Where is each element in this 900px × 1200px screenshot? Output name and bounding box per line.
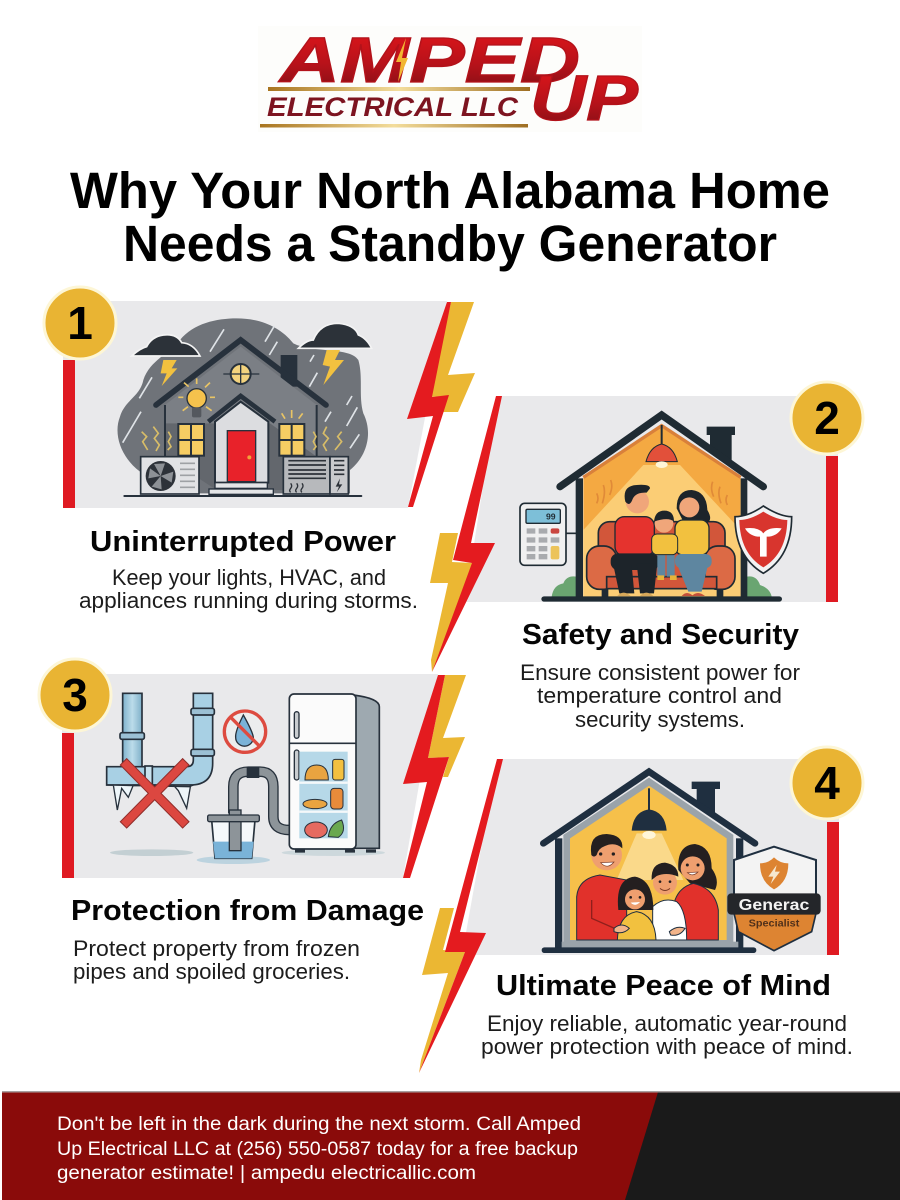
body 2 line 2: temperature control and <box>537 683 782 708</box>
light cone <box>583 465 741 597</box>
badge 1 <box>44 287 116 359</box>
wall left <box>555 838 562 948</box>
lightning right <box>323 350 344 385</box>
panel 2 background <box>465 396 838 602</box>
footer top edge <box>2 1091 900 1092</box>
title line 2: Needs a Standby Generator <box>123 215 777 272</box>
footer line 3: generator estimate! | ampedu electricallic.com <box>57 1163 476 1184</box>
logo word ELECTRICAL LLC: ELECTRICAL LLC <box>267 92 519 122</box>
round window <box>223 364 259 384</box>
logo word AMPED: AMPED <box>277 24 580 96</box>
text block 1 <box>79 526 418 613</box>
floor <box>542 942 756 953</box>
wall right <box>736 838 743 948</box>
left cloud <box>132 335 200 356</box>
porch gable <box>208 396 275 422</box>
badge 2: 2 <box>814 392 840 444</box>
logo <box>258 24 642 134</box>
panel 3 bolt yellow <box>428 675 466 777</box>
roof <box>560 415 763 487</box>
red door <box>227 431 256 482</box>
badge 4: 4 <box>814 757 840 809</box>
body 4 line 2: power protection with peace of mind. <box>481 1034 853 1059</box>
panel 2 bolt yellow <box>430 533 473 672</box>
wall left <box>576 478 583 598</box>
panel 3 background <box>62 674 438 878</box>
house interior <box>567 782 730 943</box>
fridge <box>289 694 379 853</box>
panel 1 red bar <box>63 360 75 508</box>
wall lines <box>165 405 317 457</box>
rain <box>123 326 359 448</box>
badge 3: 3 <box>62 669 88 721</box>
heading 1: Uninterrupted Power <box>90 526 396 558</box>
panel 4 bolt red <box>419 759 503 1073</box>
body 2 line 3: security systems. <box>575 707 745 732</box>
porch <box>215 402 268 483</box>
panel 1 bolt red <box>407 302 451 507</box>
right cloud <box>298 323 372 348</box>
logo gold rule top <box>268 87 530 91</box>
Generac specialist badge <box>727 847 821 951</box>
heading 4: Ultimate Peace of Mind <box>496 970 831 1002</box>
panel 3 bolt red <box>403 675 449 878</box>
father <box>577 834 627 940</box>
mother <box>675 844 718 940</box>
air conditioner <box>141 457 199 494</box>
pendant lamp <box>632 788 667 839</box>
house wall lower shade <box>165 423 317 490</box>
body 1 line 1: Keep your lights, HVAC, and <box>112 565 386 590</box>
wall right <box>741 478 747 598</box>
logo background <box>258 26 642 132</box>
badge 3 <box>39 659 111 731</box>
panel 2 bolt red <box>432 396 502 672</box>
heading 2: Safety and Security <box>522 619 799 651</box>
roof <box>543 772 755 843</box>
footer line 1: Don't be left in the dark during the next storm. Call Amped <box>57 1114 581 1135</box>
footer line 2: Up Electrical LLC at (256) 550-0587 today for a free backup <box>57 1139 578 1160</box>
title <box>70 162 830 272</box>
text block 3 <box>71 895 424 984</box>
pendant lamp <box>646 425 677 468</box>
child <box>652 511 678 580</box>
light glow <box>617 833 683 880</box>
light bulb <box>178 378 215 417</box>
chimney <box>707 427 735 462</box>
panel 4: ultimate peace of mind <box>419 747 863 1073</box>
lightning left <box>161 360 177 386</box>
logo word UP: UP <box>530 62 638 134</box>
Generac specialist badge: Specialist <box>749 919 800 930</box>
shadows <box>110 849 385 864</box>
thermostat: 99 <box>546 511 556 521</box>
panel 1 bolt yellow <box>430 302 475 412</box>
sofa <box>587 522 735 597</box>
illustration: family in warm house <box>520 415 792 602</box>
panel 3 red bar <box>62 733 74 878</box>
steps <box>209 483 273 494</box>
icicles <box>107 785 193 810</box>
storm cloud backdrop <box>117 318 368 493</box>
panel 2: safety and security <box>430 382 863 672</box>
text block 4 <box>481 970 853 1059</box>
illustration: happy family with Generac badge <box>542 772 821 953</box>
body 2 line 1: Ensure consistent power for <box>520 660 800 685</box>
left window <box>178 424 204 456</box>
footer dark section <box>2 1092 900 1200</box>
thermostat <box>520 503 577 565</box>
panel 4 background <box>462 759 839 955</box>
title line 1: Why Your North Alabama Home <box>70 162 830 219</box>
mother <box>675 490 712 596</box>
father <box>611 485 659 596</box>
panel 4 bolt yellow <box>419 908 465 1073</box>
heat waves <box>142 427 342 451</box>
hose <box>233 767 289 830</box>
girl <box>617 877 656 940</box>
illustration: frozen pipes and fridge <box>107 693 385 864</box>
body 3 line 2: pipes and spoiled groceries. <box>73 959 350 984</box>
badge 1: 1 <box>67 297 93 349</box>
frozen pipes <box>107 693 214 785</box>
badge 2 <box>791 382 863 454</box>
chimney <box>281 355 297 387</box>
text block 2 <box>520 619 800 732</box>
bucket <box>208 810 259 858</box>
boy <box>652 863 687 940</box>
generator unit <box>283 457 348 494</box>
footer red section <box>2 1092 658 1200</box>
no water sign <box>224 711 266 752</box>
chimney <box>692 782 720 815</box>
medical shield <box>735 506 792 573</box>
bushes <box>552 576 772 597</box>
roof <box>156 340 326 405</box>
illustration: house in storm <box>117 318 372 497</box>
heading 3: Protection from Damage <box>71 895 424 927</box>
ground line <box>123 495 362 497</box>
house interior <box>583 425 741 597</box>
logo gold rule bottom <box>260 124 528 128</box>
logo bolt <box>396 38 408 82</box>
body 3 line 1: Protect property from frozen <box>73 936 360 961</box>
panel 2 red bar <box>826 456 838 602</box>
panel 1 background <box>63 301 447 508</box>
right window <box>279 410 304 456</box>
floor <box>541 596 782 602</box>
hands <box>614 925 685 935</box>
red X <box>127 765 183 822</box>
badge 4 <box>791 747 863 819</box>
house wall <box>165 347 317 457</box>
footer banner <box>2 1091 900 1200</box>
panel 3: protection from damage <box>39 659 466 878</box>
ceiling shade <box>583 426 741 477</box>
panel 4 red bar <box>827 822 839 955</box>
body 1 line 2: appliances running during storms. <box>79 588 418 613</box>
heat squiggles <box>597 480 727 505</box>
Generac specialist badge: Generac <box>739 897 809 914</box>
body 4 line 1: Enjoy reliable, automatic year-round <box>487 1011 847 1036</box>
panel 1: uninterrupted power <box>44 287 475 508</box>
